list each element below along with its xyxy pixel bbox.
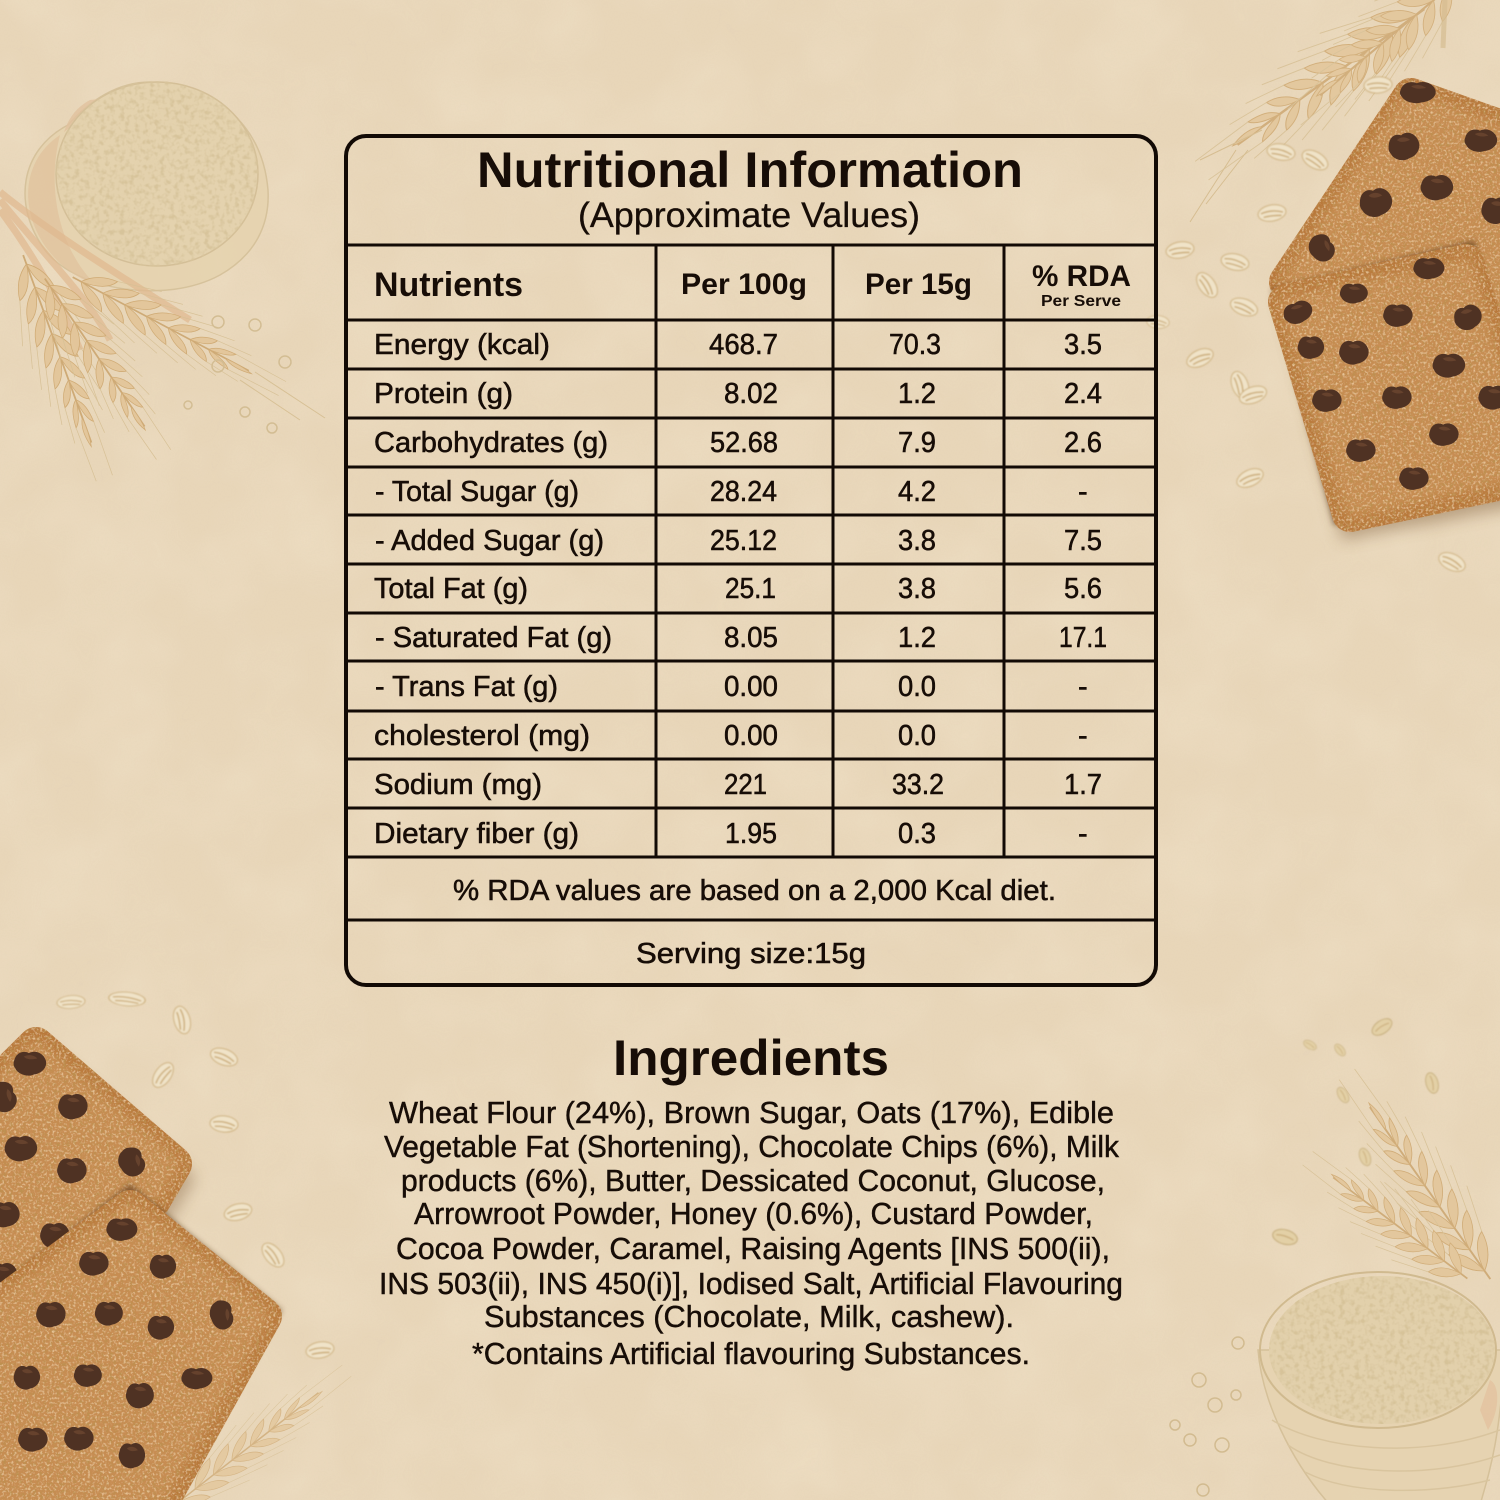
row: total sugar: 4.2	[898, 476, 936, 508]
row: added sugar: 25.12	[710, 525, 777, 557]
row: saturated fat: 8.05	[724, 622, 778, 654]
row: dietary fiber: Dietary fiber (g)	[374, 818, 579, 850]
table subtitle: (Approximate Values)	[578, 196, 920, 235]
ingredients text block: Cocoa Powder, Caramel, Raising Agents [INS 500(ii),	[396, 1231, 1110, 1266]
row: trans fat: -	[1078, 671, 1088, 703]
column headers: Per Serve	[1041, 293, 1121, 310]
back cookie body	[0, 1045, 174, 1340]
column headers: % RDA	[1032, 260, 1131, 293]
row: protein: 8.02	[724, 378, 778, 410]
column headers: Per 100g	[681, 268, 807, 301]
row: dietary fiber	[374, 818, 1088, 850]
row: total fat: 25.1	[725, 573, 776, 605]
row: trans fat	[375, 671, 1088, 703]
ingredients heading: Ingredients	[613, 1030, 889, 1086]
row: dietary fiber: -	[1078, 818, 1088, 850]
row: total fat: 5.6	[1064, 573, 1102, 605]
footnote: serving size: Serving size:15g	[636, 938, 866, 970]
row: energy: 468.7	[709, 329, 778, 361]
footnote: RDA basis: % RDA values are based on a 2,000 Kcal diet.	[453, 875, 1056, 907]
row: carbohydrates: Carbohydrates (g)	[374, 427, 608, 459]
ingredients text block: Vegetable Fat (Shortening), Chocolate Chips (6%), Milk	[384, 1129, 1119, 1164]
chips on back cookie	[1304, 82, 1500, 266]
row: cholesterol: cholesterol (mg)	[374, 720, 590, 752]
row: added sugar: 7.5	[1064, 525, 1102, 557]
row: carbohydrates	[374, 427, 1102, 459]
illustration: sketched bowl and wheat, top left	[0, 82, 325, 489]
illustration: oat flakes, top right	[1146, 76, 1468, 575]
row: trans fat: 0.00	[724, 671, 778, 703]
row: total sugar: - Total Sugar (g)	[375, 476, 579, 508]
row: cholesterol: 0.00	[724, 720, 778, 752]
row: added sugar: 3.8	[898, 525, 936, 557]
row: total sugar: -	[1078, 476, 1088, 508]
chips on back cookie	[0, 1052, 148, 1288]
ingredients text block: Wheat Flour (24%), Brown Sugar, Oats (17%), Edible	[389, 1095, 1114, 1130]
row: total sugar	[375, 476, 1088, 508]
front cookie body	[0, 1208, 264, 1500]
panel: nutritional information table	[346, 136, 1156, 985]
column headers	[374, 260, 1131, 310]
row: cholesterol: 0.0	[898, 720, 936, 752]
row: carbohydrates: 2.6	[1064, 427, 1102, 459]
row: sodium	[374, 769, 1102, 801]
row: total fat	[374, 573, 1102, 605]
row: dietary fiber: 0.3	[898, 818, 936, 850]
row: saturated fat	[375, 622, 1107, 654]
front cookie body	[1286, 262, 1500, 514]
row: total fat: 3.8	[898, 573, 936, 605]
row: total sugar: 28.24	[710, 476, 777, 508]
row: sodium: Sodium (mg)	[374, 769, 542, 801]
row: energy	[374, 329, 1102, 361]
chips on front cookie	[1281, 258, 1500, 490]
row: carbohydrates: 7.9	[898, 427, 936, 459]
row: sodium: 33.2	[892, 769, 944, 801]
illustration: sketched bowl and wheat, bottom right	[1170, 1055, 1500, 1500]
row: saturated fat: - Saturated Fat (g)	[375, 622, 612, 654]
row: energy: 3.5	[1064, 329, 1102, 361]
row: dietary fiber: 1.95	[725, 818, 777, 850]
ingredients text block: *Contains Artificial flavouring Substances.	[472, 1336, 1030, 1371]
chips on front cookie	[14, 1218, 235, 1468]
ingredients text block: Arrowroot Powder, Honey (0.6%), Custard Powder,	[414, 1196, 1093, 1231]
row: protein: 1.2	[898, 378, 936, 410]
row: saturated fat: 1.2	[898, 622, 936, 654]
back cookie body	[1287, 96, 1500, 360]
column headers: Per 15g	[865, 268, 972, 301]
row: total fat: Total Fat (g)	[374, 573, 528, 605]
row: trans fat: 0.0	[898, 671, 936, 703]
row: added sugar: - Added Sugar (g)	[375, 525, 604, 557]
column headers: Nutrients	[374, 266, 523, 304]
illustration: cookies, bottom left	[0, 1043, 282, 1500]
row: carbohydrates: 52.68	[710, 427, 778, 459]
ingredients text block: INS 503(ii), INS 450(i)], Iodised Salt, Artificial Flavouring	[379, 1266, 1123, 1301]
illustration: cookies, top right	[1272, 82, 1500, 540]
row: energy: Energy (kcal)	[374, 329, 550, 361]
row: cholesterol: -	[1078, 720, 1088, 752]
row: trans fat: - Trans Fat (g)	[375, 671, 558, 703]
row: protein: 2.4	[1064, 378, 1102, 410]
row: protein	[374, 378, 1102, 410]
illustration: oat flakes, bottom left	[56, 991, 335, 1360]
ingredients text block: products (6%), Butter, Dessicated Coconut, Glucose,	[401, 1163, 1105, 1198]
row: sodium: 1.7	[1064, 769, 1102, 801]
ingredients text block: Substances (Chocolate, Milk, cashew).	[484, 1299, 1014, 1334]
row: energy: 70.3	[889, 329, 941, 361]
row: protein: Protein (g)	[374, 378, 513, 410]
table title: Nutritional Information	[477, 142, 1023, 198]
row: added sugar	[375, 525, 1102, 557]
illustration: wheat stalk, bottom left	[153, 1350, 363, 1500]
row: sodium: 221	[724, 769, 767, 801]
illustration: wheat stalks, top right	[1177, 0, 1481, 222]
row: cholesterol	[374, 720, 1088, 752]
row: saturated fat: 17.1	[1059, 622, 1107, 654]
ingredients text block	[379, 1095, 1123, 1371]
illustration: seeds, bottom right	[1271, 1015, 1441, 1247]
